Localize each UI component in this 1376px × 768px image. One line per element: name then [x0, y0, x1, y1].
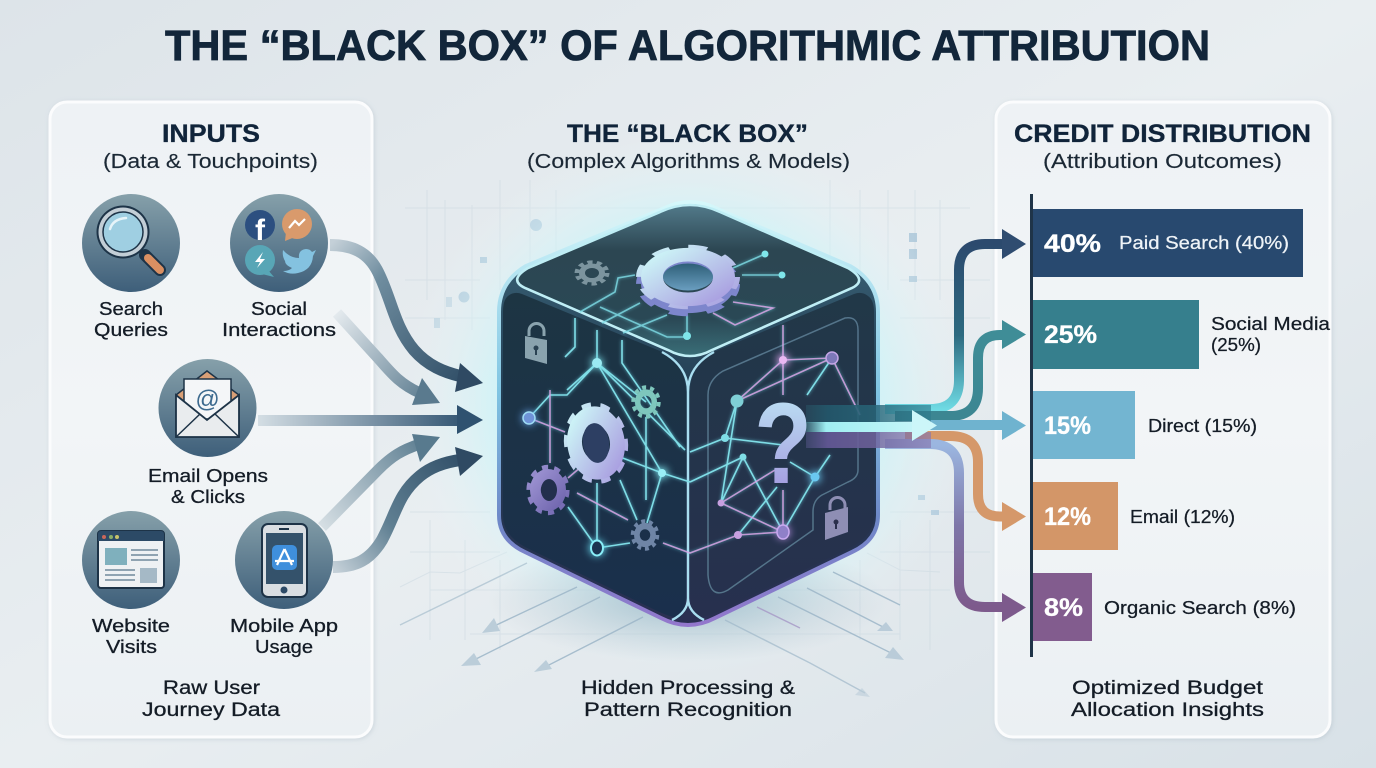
- icon: social interactions: [230, 194, 328, 292]
- bar: social media: Social Media: [1211, 313, 1331, 334]
- caption: optimized budget: [1071, 677, 1264, 721]
- floor data lines and arrows: [400, 563, 904, 697]
- icon: website visits: [82, 511, 180, 609]
- right face: [690, 293, 874, 618]
- heading: inputs: INPUTS: [162, 120, 260, 148]
- heading: credit distribution: [1014, 120, 1311, 173]
- label: mobile app usage: Mobile App: [230, 615, 338, 636]
- label: social interactions: Interactions: [222, 319, 336, 340]
- heading: black box: [527, 120, 850, 173]
- panel: inputs: [50, 102, 372, 737]
- arrow: mobile to box upper: [333, 447, 483, 567]
- top face: [517, 205, 859, 356]
- question mark: ?: [754, 380, 812, 508]
- panel: credit distribution: [996, 102, 1330, 737]
- icon: right lock: [825, 498, 848, 540]
- bar: social media: (25%): [1211, 334, 1261, 355]
- caption: optimized budget: Optimized Budget: [1072, 677, 1264, 699]
- icon: search queries: [82, 194, 180, 292]
- icon: mobile app usage: [235, 511, 333, 609]
- icon: email opens: [158, 359, 256, 457]
- bar: direct: [1033, 391, 1257, 459]
- input arrows: [258, 245, 483, 567]
- label: search queries: Queries: [94, 319, 168, 340]
- label: social interactions: Social: [251, 298, 307, 319]
- label: email opens: & Clicks: [171, 486, 245, 507]
- circuit wires: [529, 254, 860, 553]
- label: website visits: [92, 615, 170, 657]
- icon: left lock: [525, 324, 547, 364]
- arrow: email to box: [258, 405, 483, 434]
- heading: credit distribution: CREDIT DISTRIBUTION: [1014, 120, 1311, 148]
- heading: inputs: [103, 120, 318, 173]
- bar: email: 12%: [1044, 503, 1091, 531]
- glow behind cube: [403, 135, 973, 675]
- right face inset frame: [708, 318, 858, 593]
- black box cube: [499, 202, 878, 625]
- caption: raw user journey data: Journey Data: [142, 699, 280, 721]
- caption: hidden processing: Hidden Processing &: [581, 677, 795, 699]
- bar: email: Email (12%): [1130, 506, 1235, 527]
- title: THE “BLACK BOX” OF ALGORITHMIC ATTRIBUTION: [165, 22, 1210, 70]
- label: social interactions: [222, 298, 336, 340]
- bar: email: [1033, 482, 1235, 550]
- gear: top small: [577, 262, 607, 284]
- label: website visits: Visits: [106, 636, 157, 657]
- gear: top large: [641, 248, 735, 313]
- bar chart: credit distribution: [1030, 194, 1331, 657]
- arrow: social to box upper: [330, 245, 483, 392]
- network nodes: [522, 250, 838, 556]
- bar: direct: 15%: [1044, 412, 1091, 440]
- floor shadow: [488, 538, 888, 662]
- gear: left lower: [529, 468, 567, 512]
- centre seam: [662, 352, 714, 620]
- arrow: to organic search: [885, 444, 1026, 622]
- label: mobile app usage: [230, 615, 338, 657]
- cube silhouette: [499, 202, 878, 625]
- arrow: to direct: [925, 411, 1026, 440]
- bar: organic search: 8%: [1044, 594, 1083, 622]
- axis: [1030, 194, 1033, 657]
- label: mobile app usage: Usage: [255, 636, 313, 657]
- heading: black box: (Complex Algorithms & Models): [527, 150, 850, 173]
- bar: paid search: [1033, 209, 1303, 277]
- label: search queries: Search: [99, 298, 163, 319]
- label: search queries: [94, 298, 168, 340]
- heading: inputs: (Data & Touchpoints): [103, 150, 318, 173]
- bar: social media: [1033, 300, 1331, 369]
- heading: credit distribution: (Attribution Outcomes): [1043, 150, 1282, 173]
- caption: optimized budget: Allocation Insights: [1071, 699, 1264, 721]
- gear: bottom small: [633, 521, 657, 549]
- caption: raw user journey data: Raw User: [163, 677, 261, 699]
- bar: paid search: 40%: [1044, 230, 1101, 258]
- background data blocks: [434, 219, 939, 515]
- output arrow from box: [806, 405, 937, 448]
- heading: black box: THE “BLACK BOX”: [567, 120, 808, 148]
- label: website visits: Website: [92, 615, 170, 636]
- bar: organic search: Organic Search (8%): [1104, 597, 1296, 618]
- bar: direct: Direct (15%): [1148, 415, 1257, 436]
- bar: social media: 25%: [1044, 321, 1097, 349]
- arrow: to paid search: [885, 229, 1026, 409]
- arrow: to social media: [895, 320, 1026, 416]
- label: email opens: Email Opens: [148, 465, 268, 486]
- bar: organic search: [1033, 573, 1296, 641]
- caption: hidden processing: Pattern Recognition: [584, 699, 792, 721]
- icon: email opens: @: [195, 386, 220, 413]
- left face: [503, 293, 686, 618]
- gear: left large: [562, 403, 630, 483]
- label: email opens: [148, 465, 268, 507]
- icon: social interactions: f: [255, 214, 266, 247]
- arrow: social to box lower: [337, 313, 440, 405]
- background circuit grid: [400, 180, 990, 650]
- arrow: mobile to box lower: [322, 434, 440, 527]
- bar: paid search: Paid Search (40%): [1119, 232, 1289, 253]
- caption: raw user journey data: [142, 677, 280, 721]
- caption: hidden processing: [581, 677, 795, 721]
- gear: teal small: [633, 387, 659, 417]
- arrow: to email: [905, 436, 1026, 531]
